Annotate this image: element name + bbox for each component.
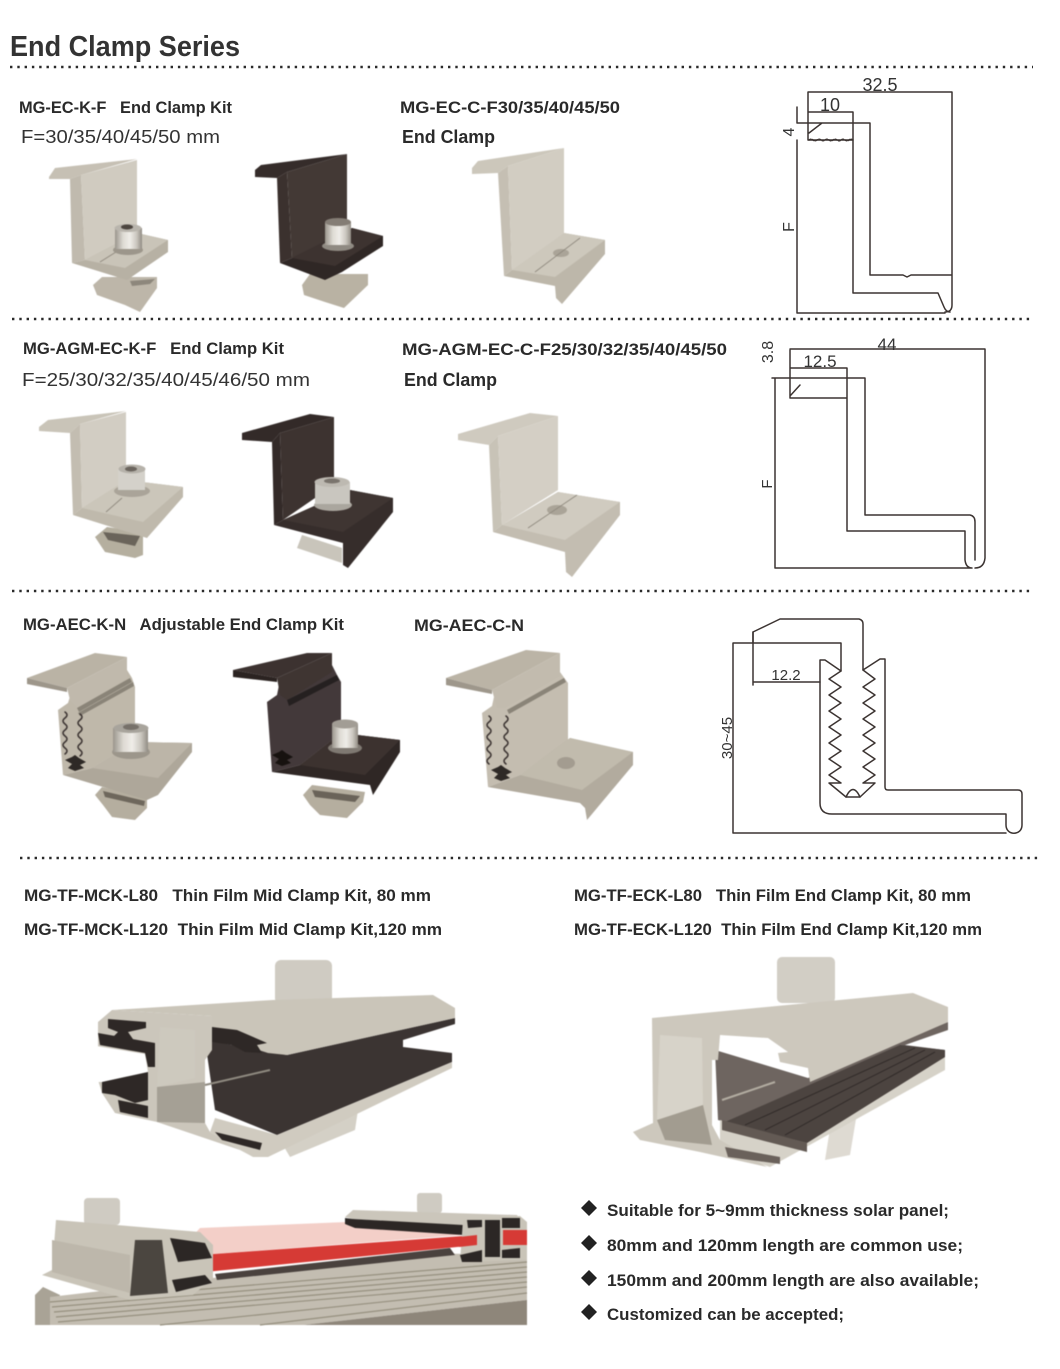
title: End Clamp Series [10, 31, 240, 63]
bullet list: Suitable for 5~9mm thickness solar panel; [607, 1202, 949, 1220]
clamp kit black section 1 [255, 154, 383, 308]
section 1 labels: MG-EC-K-F End Clamp Kit [19, 99, 233, 117]
dimension drawing: adjustable clamp 12.2: 12.2 [771, 667, 801, 684]
section 1 labels: F=30/35/40/45/50 mm [21, 126, 220, 147]
section 1 labels: MG-EC-C-F30/35/40/45/50 [400, 99, 620, 117]
clamp kit silver section 2 [39, 411, 183, 558]
icon: diamond bullets [581, 1200, 597, 1320]
section 2 labels [22, 340, 727, 390]
section 4 labels: MG-TF-ECK-L120 Thin Film End Clamp Kit,120 mm [574, 921, 982, 939]
dimension drawing: end clamp 44: 3.8 [760, 341, 777, 363]
section 2 labels: F=25/30/32/35/40/45/46/50 mm [22, 369, 310, 390]
section 4 labels: MG-TF-ECK-L80 Thin Film End Clamp Kit, 80 mm [574, 887, 971, 905]
section 4 labels: MG-TF-MCK-L80 Thin Film Mid Clamp Kit, 80 mm [24, 887, 431, 905]
dimension drawing: end clamp 32.5: 10 [820, 95, 840, 115]
thin film mid clamp image [96, 960, 455, 1157]
bullet list: Customized can be accepted; [607, 1306, 844, 1324]
end clamp silver section 1 [472, 148, 605, 304]
clamp kit black section 2 [242, 414, 393, 568]
bullet list: 150mm and 200mm length are also available; [607, 1272, 979, 1290]
section 3 labels: MG-AEC-C-N [414, 616, 524, 635]
end clamp silver section 2 [458, 413, 620, 577]
dimension drawing: end clamp 32.5: 32.5 [862, 75, 898, 95]
section 4 labels [24, 887, 982, 939]
dimension drawing: end clamp 44: 44 [878, 335, 896, 354]
bullet list [581, 1200, 979, 1324]
clamp kit silver section 1 [49, 159, 168, 312]
section 2 labels: MG-AGM-EC-K-F End Clamp Kit [23, 340, 284, 358]
adjustable clamp black [233, 653, 400, 818]
panel installation image [35, 1193, 527, 1325]
adjustable end clamp silver [446, 650, 633, 820]
dimension drawing: adjustable clamp 12.2 [719, 619, 1022, 833]
dimension drawing: adjustable clamp 12.2: 30~45 [719, 717, 736, 759]
section 1 labels: End Clamp [402, 127, 495, 147]
bullet list: 80mm and 120mm length are common use; [607, 1237, 963, 1255]
section 2 labels: MG-AGM-EC-C-F25/30/32/35/40/45/50 [402, 341, 727, 359]
dimension drawing: end clamp 44: F [759, 479, 776, 489]
dimension drawing: end clamp 44: 12.5 [803, 352, 837, 371]
section 2 labels: End Clamp [404, 370, 497, 390]
thin film end clamp image [633, 957, 948, 1167]
dimension drawing: end clamp 44 [759, 335, 985, 568]
adjustable clamp silver [27, 653, 192, 820]
dimension drawing: end clamp 32.5 [781, 75, 952, 313]
dimension drawing: end clamp 32.5: 4 [781, 127, 798, 136]
section 1 labels [19, 99, 620, 147]
section 3 labels: MG-AEC-K-N Adjustable End Clamp Kit [23, 616, 345, 634]
section 4 labels: MG-TF-MCK-L120 Thin Film Mid Clamp Kit,120 mm [24, 921, 442, 939]
section 3 labels [23, 616, 524, 635]
dimension drawing: end clamp 32.5: F [781, 222, 798, 232]
